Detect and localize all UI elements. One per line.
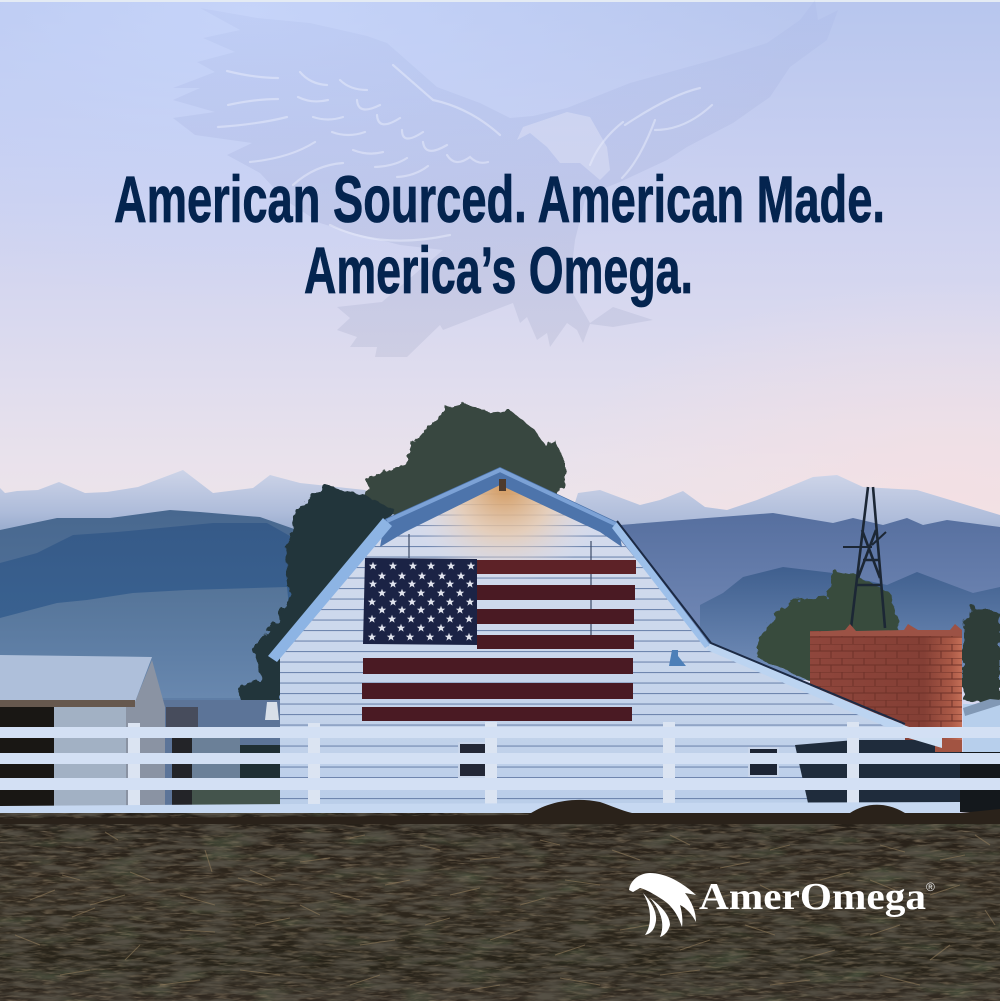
shed dark bay xyxy=(0,707,54,807)
barn wall boards xyxy=(280,494,905,800)
barn wall xyxy=(280,478,905,815)
dirt mounds xyxy=(0,800,1000,824)
eagle head xyxy=(517,112,610,180)
eagle watermark xyxy=(173,0,838,357)
icon: eagle head xyxy=(629,873,696,937)
roof end xyxy=(903,725,942,748)
window right xyxy=(749,748,778,776)
wall lamp left xyxy=(265,702,279,720)
shed eave xyxy=(0,700,135,707)
fence rails xyxy=(0,727,1000,818)
warm gable light xyxy=(419,486,586,578)
fence posts xyxy=(128,722,859,811)
far snow-capped mountains xyxy=(0,470,1000,550)
upper roof highlight xyxy=(387,470,617,525)
headline: America’s Omega. xyxy=(304,233,693,307)
barn xyxy=(265,467,962,818)
dark equipment under roof xyxy=(795,740,960,803)
roof dark edge xyxy=(617,521,905,724)
mid mountain ranges xyxy=(0,510,1000,738)
left roof slope xyxy=(268,518,392,662)
wall lamp right xyxy=(669,650,686,666)
small right shed xyxy=(960,699,1000,812)
roof lamp xyxy=(499,479,506,491)
American flag mural xyxy=(362,558,636,721)
registered mark: ® xyxy=(926,880,935,894)
wordmark: AmerOmega xyxy=(699,876,926,918)
left shed and background xyxy=(0,655,300,815)
brick silo xyxy=(810,624,962,751)
sky background xyxy=(0,0,1000,540)
silo base strip xyxy=(935,740,962,752)
shed door xyxy=(54,707,126,807)
trees behind barn xyxy=(237,403,1000,750)
ground field xyxy=(0,800,1000,1001)
right roof slope xyxy=(612,522,710,648)
flag stars xyxy=(368,562,475,641)
flag stripes xyxy=(362,560,636,721)
white fence xyxy=(0,722,1000,818)
door seam lines xyxy=(409,534,591,636)
AmerOmega logo xyxy=(629,873,935,937)
window left xyxy=(459,743,490,777)
lower roof slope xyxy=(707,643,942,748)
shed roof xyxy=(0,655,152,702)
upper roof band xyxy=(380,467,622,547)
parked vehicle xyxy=(166,707,198,727)
headline xyxy=(114,162,885,307)
eagle silhouette xyxy=(173,0,838,357)
eagle feather marks xyxy=(218,65,712,241)
straw xyxy=(15,832,995,990)
flag canton xyxy=(363,558,477,645)
windmill xyxy=(843,487,886,628)
